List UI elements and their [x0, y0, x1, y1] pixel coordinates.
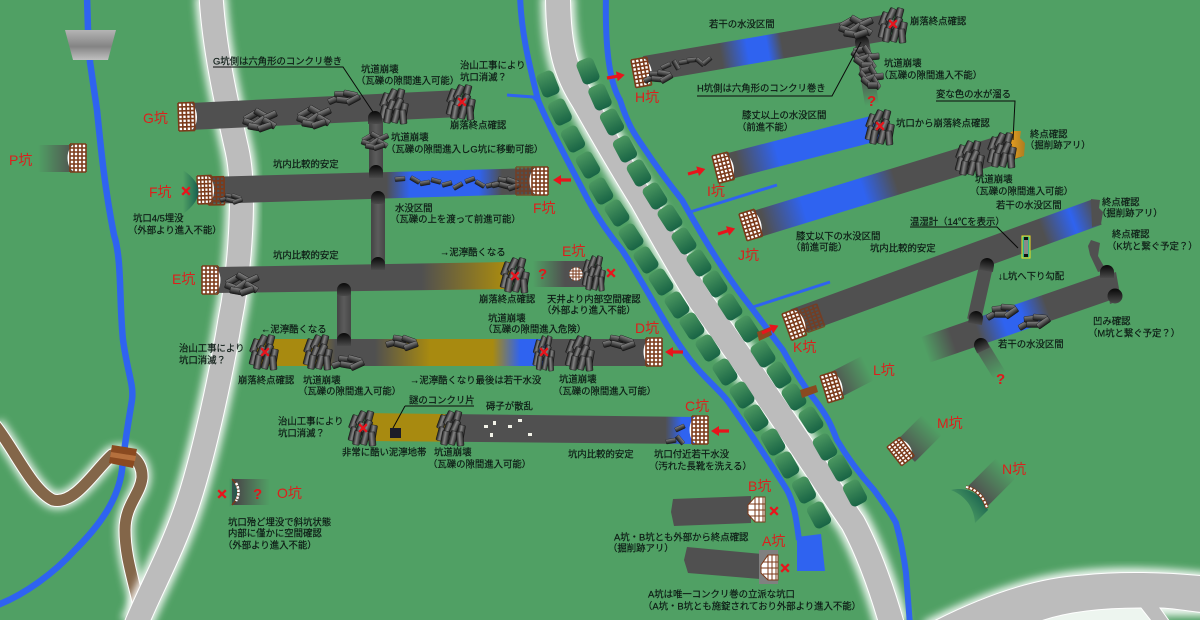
A label: A坑 — [762, 533, 785, 549]
D danger note: （瓦礫の隙間進入危険） — [483, 324, 586, 334]
G tunnel — [143, 84, 476, 151]
P tunnel — [9, 144, 86, 172]
J collapse note: 坑道崩壊 — [975, 174, 1013, 184]
C stable note: 坑内比較的安定 — [568, 448, 634, 460]
L water note: 若干の水没区間 — [998, 338, 1064, 350]
H branch note: 坑道崩壊 — [884, 58, 922, 68]
E second tunnel section — [533, 243, 615, 291]
D collapse note: （瓦礫の隙間進入可能） — [298, 386, 401, 396]
E cross — [607, 269, 615, 277]
strange water note: 変な色の水が溜る — [936, 88, 1011, 100]
F left gates — [197, 175, 224, 205]
A tunnel — [684, 533, 789, 584]
B gate — [748, 497, 765, 522]
K arrow — [760, 321, 780, 338]
I gate — [712, 152, 737, 183]
N tunnel — [951, 461, 1026, 523]
D collapse note 2: （瓦礫の隙間進入可能） — [553, 386, 656, 396]
P gate — [68, 144, 86, 172]
P label: P坑 — [9, 152, 32, 168]
water note F: （瓦礫の上を渡って前進可能） — [390, 214, 521, 224]
A gate — [761, 555, 778, 580]
H label: H坑 — [635, 89, 659, 105]
E arches — [337, 257, 385, 296]
A cross — [781, 564, 789, 572]
E rubble right — [582, 255, 606, 291]
F labels: F坑 — [149, 184, 172, 200]
J water note: 膝丈以下の水没区間 — [796, 230, 880, 242]
F right gates — [516, 167, 548, 195]
G end note: 崩落終点確認 — [450, 120, 507, 130]
central road — [558, 0, 892, 620]
round grate — [569, 267, 583, 281]
O cross — [218, 490, 226, 498]
E rubble — [224, 257, 530, 296]
F tunnel — [149, 165, 571, 216]
K stable note: 坑内比較的安定 — [870, 242, 936, 254]
lower question branch — [981, 345, 1000, 376]
O tunnel — [218, 478, 302, 507]
G roof note: G坑側は六角形のコンクリ巻き — [213, 56, 342, 66]
N buried mound — [951, 489, 988, 523]
question: ? — [996, 371, 1005, 388]
L up end note: 終点確認 — [1112, 228, 1150, 240]
insulators — [484, 419, 532, 437]
C gate — [690, 416, 708, 444]
G mouth note: 治山工事により — [460, 60, 525, 70]
M label: M坑 — [937, 415, 963, 431]
K end note: （掘削跡アリ） — [1097, 208, 1163, 218]
K water note: 若干の水没区間 — [996, 200, 1062, 210]
annotations left group — [128, 56, 752, 550]
ceiling note: 天井より内部空間確認 — [547, 294, 641, 304]
F arches — [369, 165, 385, 204]
C mud note: 非常に酷い泥濘地帯 — [342, 446, 426, 458]
I tunnel — [687, 109, 895, 199]
J label: J坑 — [738, 247, 759, 263]
I arrow — [687, 164, 707, 179]
H roof note: H坑側は六角形のコンクリ巻き — [697, 82, 826, 94]
C rubble — [348, 410, 686, 446]
dam — [65, 30, 116, 60]
K inner hatch — [800, 304, 825, 332]
annotations right group — [608, 16, 1198, 612]
C collapse note: （瓦礫の隙間進入可能） — [428, 458, 531, 470]
D gate — [644, 338, 662, 366]
trees left column — [535, 69, 833, 530]
upper branch — [1088, 240, 1106, 272]
stable note 2: 坑内比較的安定 — [273, 250, 339, 260]
dent note: （M坑と繋ぐ予定？） — [1088, 328, 1180, 338]
L label: L坑 — [873, 362, 895, 378]
O label: O坑 — [277, 485, 302, 501]
J water note: （前進可能） — [791, 242, 847, 252]
J rubble — [955, 132, 1017, 176]
J end note: （掘削跡アリ） — [1025, 140, 1091, 150]
F rubble — [220, 176, 521, 205]
E label 2: E坑 — [562, 243, 585, 259]
G mouth note: 坑口消滅？ — [460, 72, 507, 82]
J orange water — [1007, 131, 1025, 160]
H gate — [631, 57, 654, 88]
D collapse note 2: 坑道崩壊 — [559, 374, 597, 384]
O note: （外部より進入不能） — [223, 540, 317, 550]
L up end note: （K坑と繋ぐ予定？） — [1107, 240, 1198, 252]
I rubble — [865, 109, 895, 145]
river left of central road — [520, 0, 799, 540]
J gate — [739, 209, 765, 241]
connectors between west tunnels — [337, 112, 385, 341]
D mud note: →泥濘酷くなり最後は若干水没 — [410, 374, 542, 386]
concrete fragment — [390, 428, 401, 438]
J end note: 終点確認 — [1030, 128, 1068, 140]
B cross — [770, 507, 778, 515]
arches — [968, 265, 1122, 353]
thermometer note: 温湿計（14℃を表示） — [910, 216, 1005, 227]
H water note: 若干の水没区間 — [709, 18, 775, 30]
mud note E: →泥濘酷くなる — [440, 246, 506, 258]
D end note: 崩落終点確認 — [238, 374, 295, 386]
B tunnel — [671, 478, 778, 526]
H question: ? — [867, 93, 876, 110]
K end note: 終点確認 — [1102, 196, 1140, 208]
C arrow — [711, 426, 729, 436]
C water note: 坑口付近若干水没 — [654, 448, 730, 460]
E label: E坑 — [172, 271, 195, 287]
E tunnel — [172, 257, 530, 296]
G rubble — [242, 84, 476, 132]
C mouth note: 治山工事により — [278, 416, 343, 426]
D mud left note: ←泥濘酷くなる — [261, 324, 327, 334]
left road — [136, 0, 241, 620]
D danger note: 坑道崩壊 — [488, 312, 526, 324]
rubble in connector — [361, 131, 389, 151]
J collapse note: （瓦礫の隙間進入可能） — [970, 186, 1073, 196]
D label: D坑 — [635, 320, 659, 336]
main section — [925, 285, 1113, 350]
ceiling note: （外部より進入不能） — [542, 304, 636, 316]
AB end note: A坑・B坑とも外部から終点確認 — [614, 532, 749, 542]
C collapse note: 坑道崩壊 — [434, 446, 472, 458]
connector note: 坑道崩壊 — [391, 132, 429, 142]
C mouth note: 坑口消滅？ — [278, 428, 325, 438]
I water note: 膝丈以上の水没区間 — [742, 110, 826, 120]
K arch — [979, 257, 995, 272]
dent note: 凹み確認 — [1093, 316, 1131, 326]
G gate — [178, 102, 197, 131]
E question: ? — [538, 266, 547, 283]
I water note: （前進不能） — [737, 122, 793, 132]
left river — [0, 0, 132, 606]
O buried gate — [229, 478, 238, 507]
bridges over right river — [757, 327, 818, 398]
I end note: 坑口から崩落終点確認 — [896, 118, 990, 128]
E gate — [202, 266, 220, 294]
D rubble — [249, 334, 636, 373]
C label: C坑 — [685, 398, 709, 414]
slope note: ↓L坑へ下り勾配 — [998, 270, 1065, 282]
F labels: F坑 — [533, 200, 556, 216]
D tunnel — [249, 320, 683, 373]
D arch — [337, 333, 351, 346]
M tunnel — [887, 415, 963, 466]
H branch note: （瓦礫の隙間進入不能） — [879, 70, 982, 80]
H arch — [854, 34, 870, 49]
leader lines — [213, 42, 1018, 428]
I label: I坑 — [707, 183, 725, 199]
K gate — [782, 308, 809, 340]
O question: ? — [253, 486, 262, 503]
K-L connector — [974, 262, 987, 320]
H arrow — [606, 70, 626, 83]
H tunnel — [606, 7, 908, 110]
D collapse note: 坑道崩壊 — [303, 374, 341, 386]
water note F: 水没区間 — [395, 202, 433, 214]
arch below G — [368, 111, 382, 124]
K label: K坑 — [793, 339, 816, 355]
N label: N坑 — [1002, 461, 1026, 477]
K tunnel — [760, 199, 1103, 355]
L tunnel network — [925, 240, 1122, 388]
H branch — [862, 40, 872, 105]
F buried note: （外部より進入不能） — [128, 224, 222, 236]
L gate — [820, 371, 846, 403]
connector note: （瓦礫の隙間進入しG坑に移動可能） — [386, 144, 543, 154]
C water note: （汚れた長靴を洗える） — [649, 460, 752, 472]
C tunnel — [348, 398, 729, 446]
trees right column — [575, 56, 869, 508]
insulator note: 碍子が散乱 — [486, 400, 533, 412]
pond — [797, 534, 825, 571]
G collapse note: （瓦礫の隙間進入可能） — [356, 75, 459, 86]
brown mountain path — [0, 425, 142, 610]
M gate — [887, 436, 916, 466]
H end note: 崩落終点確認 — [910, 16, 967, 26]
tributaries — [507, 95, 830, 307]
J arrow — [716, 224, 737, 239]
bridge on brown path — [109, 445, 137, 468]
AB end note: （掘削跡アリ） — [608, 542, 674, 554]
bottom right road — [925, 572, 1200, 620]
stable note 1: 坑内比較的安定 — [273, 158, 339, 170]
A note: （A坑・B坑とも施錠されており外部より進入不能） — [643, 600, 861, 612]
N gate — [966, 487, 987, 508]
F buried note: 坑口4/5埋没 — [133, 212, 184, 224]
A concrete portal — [759, 550, 778, 584]
D mouth note: 治山工事により — [179, 342, 244, 354]
O note: 坑口殆ど埋没で斜坑状態 — [228, 516, 331, 528]
A note: A坑は唯一コンクリ巻の立派な坑口 — [648, 588, 795, 600]
F cross — [182, 187, 190, 195]
D arrow — [665, 347, 683, 357]
L gate tunnel — [820, 362, 895, 403]
F arrow — [553, 175, 571, 185]
O note: 内部に僅かに空間確認 — [228, 528, 322, 538]
J tunnel — [716, 131, 1025, 263]
river right of central road — [606, 0, 910, 620]
L rubble — [984, 300, 1052, 334]
concrete note: 謎のコンクリ片 — [409, 394, 475, 406]
G collapse note: 坑道崩壊 — [361, 64, 399, 74]
thermometer — [1022, 236, 1030, 258]
F buried mound — [183, 170, 198, 214]
H rubble — [642, 7, 908, 95]
G label: G坑 — [143, 110, 168, 126]
D mouth note: 坑口消滅？ — [179, 354, 226, 366]
B label: B坑 — [748, 478, 771, 494]
E end note: 崩落終点確認 — [479, 294, 536, 304]
